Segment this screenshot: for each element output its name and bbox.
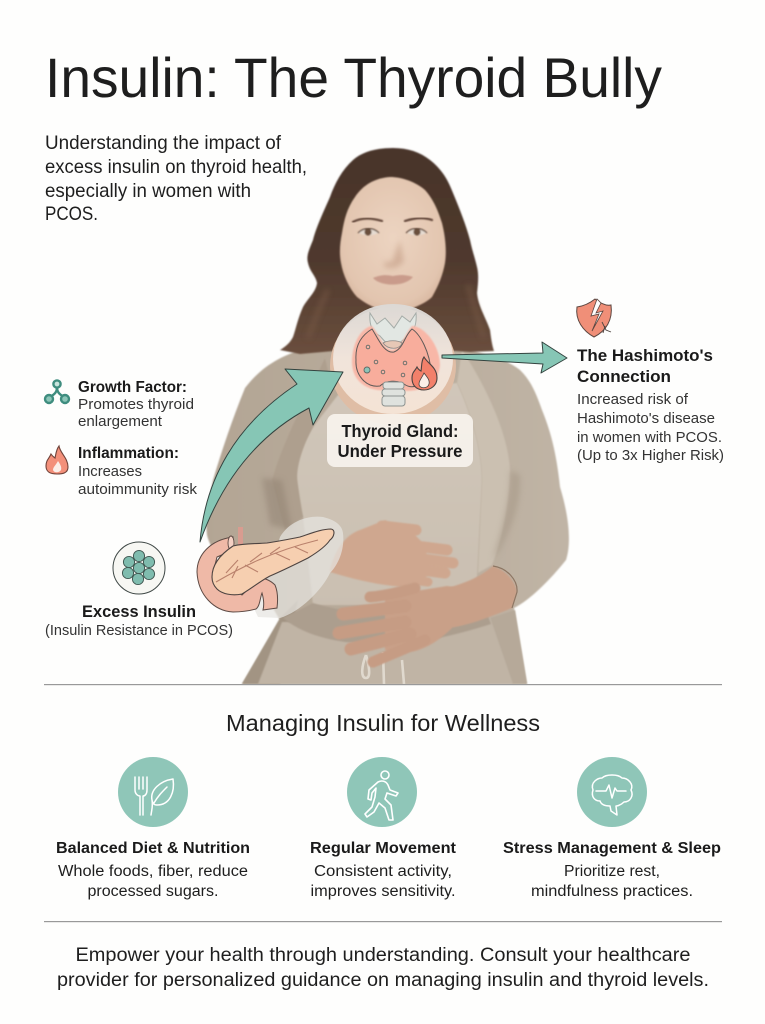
heading: Inflammation: — [78, 445, 179, 462]
waistband — [283, 603, 491, 644]
right sleeve fold — [492, 470, 520, 560]
lower cardigan panel right — [490, 610, 527, 684]
face — [340, 177, 446, 312]
hair highlights — [308, 285, 484, 338]
trachea — [382, 382, 405, 406]
nose — [384, 240, 404, 268]
description: Consistent activity, — [314, 863, 452, 880]
thyroid callout — [333, 304, 453, 414]
panel: inflammation — [46, 445, 198, 498]
description — [78, 397, 194, 430]
panel: excess insulin — [45, 542, 233, 639]
subtitle text block — [45, 132, 307, 225]
isthmus detail — [383, 341, 402, 348]
bile duct — [238, 527, 243, 547]
drawstring — [362, 652, 404, 684]
footer message: provider for personalized guidance on managing insulin and thyroid levels. — [57, 970, 709, 991]
left cardigan front band — [272, 358, 332, 530]
right cardigan front band — [457, 350, 510, 573]
description — [531, 863, 693, 900]
label: thyroid gland — [327, 414, 473, 467]
panel: movement — [310, 757, 456, 900]
pancreas illustration — [197, 517, 343, 618]
halo circle — [333, 304, 453, 414]
lower hand — [339, 586, 470, 662]
subtitle text block: excess insulin on thyroid health, — [45, 156, 307, 178]
nodules — [364, 345, 407, 377]
cuff line — [493, 566, 517, 608]
description: Prioritize rest, — [564, 863, 660, 880]
description: in women with PCOS. — [577, 429, 722, 446]
icon: walking figure — [347, 757, 417, 827]
woman portrait illustration — [206, 148, 569, 684]
heading: Balanced Diet & Nutrition — [56, 840, 250, 857]
neck skin under thyroid halo — [330, 307, 456, 425]
pancreas body — [212, 529, 334, 595]
icon: flame — [46, 446, 68, 474]
heading: Growth Factor: — [78, 379, 187, 396]
description: (Up to 3x Higher Risk) — [577, 447, 724, 464]
duodenum — [197, 537, 278, 612]
label: thyroid gland: Under Pressure — [338, 441, 463, 461]
pancreatic duct — [216, 540, 318, 582]
title: Insulin: The Thyroid Bully — [45, 46, 662, 109]
pancreas halo — [250, 517, 343, 618]
hair — [280, 148, 494, 354]
panel: stress and sleep — [503, 757, 721, 900]
icon: fork and leaf — [118, 757, 188, 827]
description: improves sensitivity. — [310, 883, 456, 900]
description: autoimmunity risk — [78, 482, 198, 498]
description: Promotes thyroid — [78, 397, 194, 413]
subtitle text block: Understanding the impact of — [45, 132, 282, 154]
icon: insulin cells — [113, 542, 165, 594]
flame core — [419, 373, 429, 388]
caption: (Insulin Resistance in PCOS) — [45, 622, 233, 639]
cartilage — [370, 313, 416, 347]
lower cardigan panel left — [242, 600, 298, 684]
cardigan body — [206, 347, 569, 684]
heading: Stress Management & Sleep — [503, 840, 721, 857]
upper hand — [330, 520, 453, 587]
description — [577, 391, 724, 464]
icon: growth factor — [45, 380, 69, 403]
heading: Excess Insulin — [82, 603, 196, 621]
duodenum opening — [228, 536, 234, 550]
subtitle text block: especially in women with — [45, 180, 251, 202]
description: Increased risk of — [577, 391, 689, 408]
panel: diet — [56, 757, 250, 900]
eyebrows — [353, 218, 432, 222]
footer message: Empower your health through understanding. Consult your healthcare — [76, 945, 690, 966]
icon: brain with pulse — [577, 757, 647, 827]
icon: cracked shield — [577, 299, 611, 337]
shirt — [297, 383, 482, 605]
arrow: pancreas to thyroid — [200, 369, 343, 542]
description — [310, 863, 456, 900]
right forearm — [447, 566, 517, 627]
description — [78, 464, 198, 498]
panel: growth factor — [45, 379, 194, 430]
thyroid gland — [356, 329, 431, 387]
description: Hashimoto's disease — [577, 410, 715, 427]
description: processed sugars. — [88, 883, 218, 900]
pants — [258, 618, 513, 684]
eyes — [358, 228, 427, 236]
lips — [373, 275, 413, 285]
heading: Regular Movement — [310, 840, 456, 857]
heading: The Hashimoto's — [577, 346, 713, 365]
description: Increases — [78, 464, 142, 480]
thyroid glow — [352, 326, 440, 391]
panel: Hashimoto's connection — [577, 299, 724, 464]
description — [58, 863, 248, 900]
subtitle text block: PCOS. — [45, 203, 98, 225]
flame icon — [412, 357, 437, 390]
panel: Hashimoto's connection: Connection — [577, 367, 671, 386]
description: mindfulness practices. — [531, 883, 693, 900]
description: enlargement — [78, 414, 162, 430]
left sleeve shadow — [262, 478, 292, 530]
arrow: thyroid to Hashimoto's — [442, 342, 567, 373]
section heading: Managing Insulin for Wellness — [226, 710, 540, 736]
description: Whole foods, fiber, reduce — [58, 863, 248, 880]
footer message — [57, 945, 709, 991]
label: thyroid gland: Thyroid Gland: — [342, 421, 458, 441]
